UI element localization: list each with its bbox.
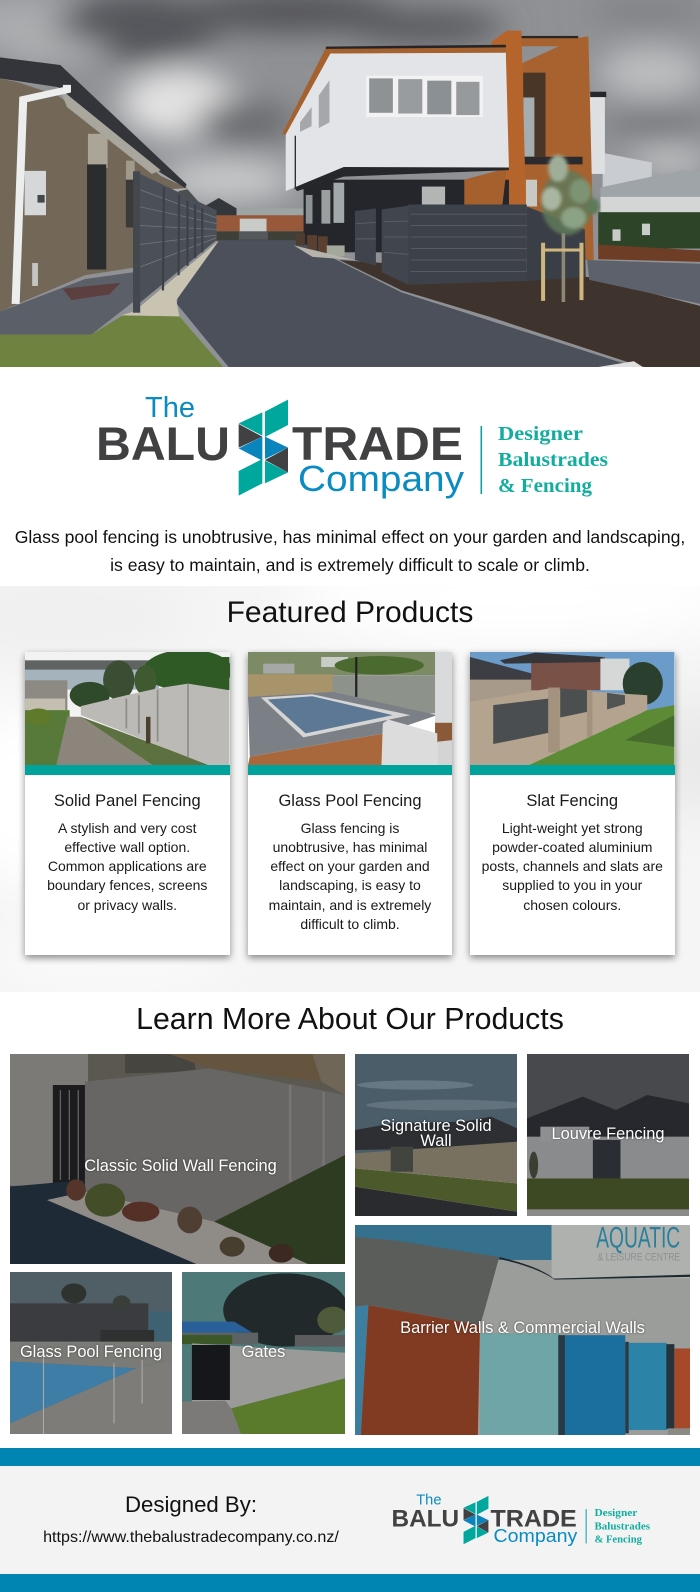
photo: slat fence on beige wall [470,652,674,765]
footer logo tagline: Balustrades [594,1521,650,1532]
far street [179,189,201,214]
logo wordmark: Company [298,458,464,499]
photo: solid panel fence by the water [25,652,230,765]
logo: The Balustrade Company [97,394,608,499]
logo tagline: Designer [498,423,583,445]
footer logo tagline [594,1508,650,1545]
teal band [248,765,452,774]
footer bottom blue band [0,1574,700,1592]
windows [366,76,483,117]
teal band [25,765,230,774]
intro text: Glass pool fencing is unobtrusive, has minimal effect on your garden and landscaping, [15,527,685,547]
card body: A stylish and very cost [58,820,196,836]
card body: effective wall option. [64,839,190,855]
planters [296,233,305,245]
logo wordmark [96,392,464,499]
gallery tile photo: gates [182,1272,345,1434]
footer panel [0,1466,700,1574]
card body: supplied to you in your [502,877,642,893]
left paving, sand strip, grass [0,272,134,335]
card body: unobtrusive, has minimal [273,839,427,855]
footer logo wordmark: Company [493,1526,578,1546]
logo tagline [498,423,608,497]
footer logo tagline: Designer [594,1508,638,1519]
logo wordmark: TRADE [292,417,463,470]
card title: Glass Pool Fencing [278,792,422,810]
card body [47,820,207,913]
card body: Light-weight yet strong [502,820,643,836]
side white wall and cedar [589,94,605,174]
footer text: website url: https://www.thebalustradecompany.co.nz/ [43,1528,339,1546]
gallery tile photo: glass pool fencing [10,1272,172,1434]
logo wordmark: BALU [97,417,230,470]
gallery label: Louvre Fencing: Louvre Fencing [552,1124,664,1142]
photo: glass-fenced pool [248,652,452,765]
gallery tile photo: classic solid wall [10,1054,345,1264]
card body: landscaping, is easy to [279,877,421,893]
heading: Learn More About Our Products: Learn More About Our Products [136,1003,564,1036]
card body [482,820,663,913]
panel: Slat Fencing card [470,652,674,955]
card title: Solid Panel Fencing [54,792,201,810]
gallery label: Classic Solid Wall Fencing: Classic Solid Wall Fencing [84,1157,277,1175]
intro text [15,527,685,575]
footer logo wordmark: BALU [392,1506,459,1532]
logo tagline: & Fencing [498,475,592,497]
card body: or privacy walls. [77,897,177,913]
footer top blue band [0,1448,700,1466]
heading: Featured Products: Featured Products [227,596,473,628]
card body: Common applications are [48,858,207,874]
gallery label: Signature Solid Wall: Signature Solid [380,1116,492,1134]
footer logo tagline: & Fencing [594,1534,642,1545]
gallery label: Gates: Gates [242,1342,285,1360]
panel: Glass Pool Fencing card [248,652,452,955]
card body: difficult to climb. [300,916,400,932]
footer logo [392,1493,650,1546]
footer logo wordmark: The [416,1493,441,1509]
card body: posts, channels and slats are [482,858,663,874]
footer logo wordmark: TRADE [490,1506,577,1532]
logo tagline: Balustrades [498,449,608,471]
footer logo wordmark [391,1493,578,1546]
white upper volume [286,52,509,191]
gallery tile photo: barrier and commercial walls [355,1225,690,1435]
card body: powder-coated aluminium [492,839,652,855]
card body: maintain, and is extremely [269,897,431,913]
left slat fence [136,172,217,304]
teal band [470,765,674,774]
gallery label: Glass Pool Fencing: Glass Pool Fencing [20,1342,162,1360]
footer logo icon [464,1496,488,1544]
hero photo: house with slat fencing and driveway [0,0,700,367]
card body: Glass fencing is [301,820,399,836]
dark lower floor [304,180,509,252]
card body: chosen colours. [523,897,621,913]
gallery label: Signature Solid Wall: Wall [420,1132,452,1150]
card body [269,820,432,932]
right houses [603,153,652,191]
gallery tile photo: signature solid wall [355,1054,517,1216]
gallery label: Signature Solid Wall [380,1116,492,1150]
panel: Solid Panel Fencing card [25,652,230,955]
featured section background [0,586,700,992]
footer text: Designed By: Designed By: [125,1492,257,1517]
young tree [541,155,599,235]
driveway [177,240,645,367]
card body: boundary fences, screens [47,877,207,893]
gallery label: Barrier Walls & Commercial Walls: Barrier Walls & Commercial Walls [400,1319,645,1337]
card title: Slat Fencing [526,792,618,810]
card body: effect on your garden and [270,858,430,874]
gallery tile photo: louvre fencing [527,1054,689,1216]
slat fence front [355,208,376,266]
left house wall [0,78,188,312]
downpipe and meter box [16,85,67,304]
logo icon: geometric S [239,400,288,496]
intro text: is easy to maintain, and is extremely difficult to scale or climb. [110,555,590,575]
ground: soil [339,260,700,367]
